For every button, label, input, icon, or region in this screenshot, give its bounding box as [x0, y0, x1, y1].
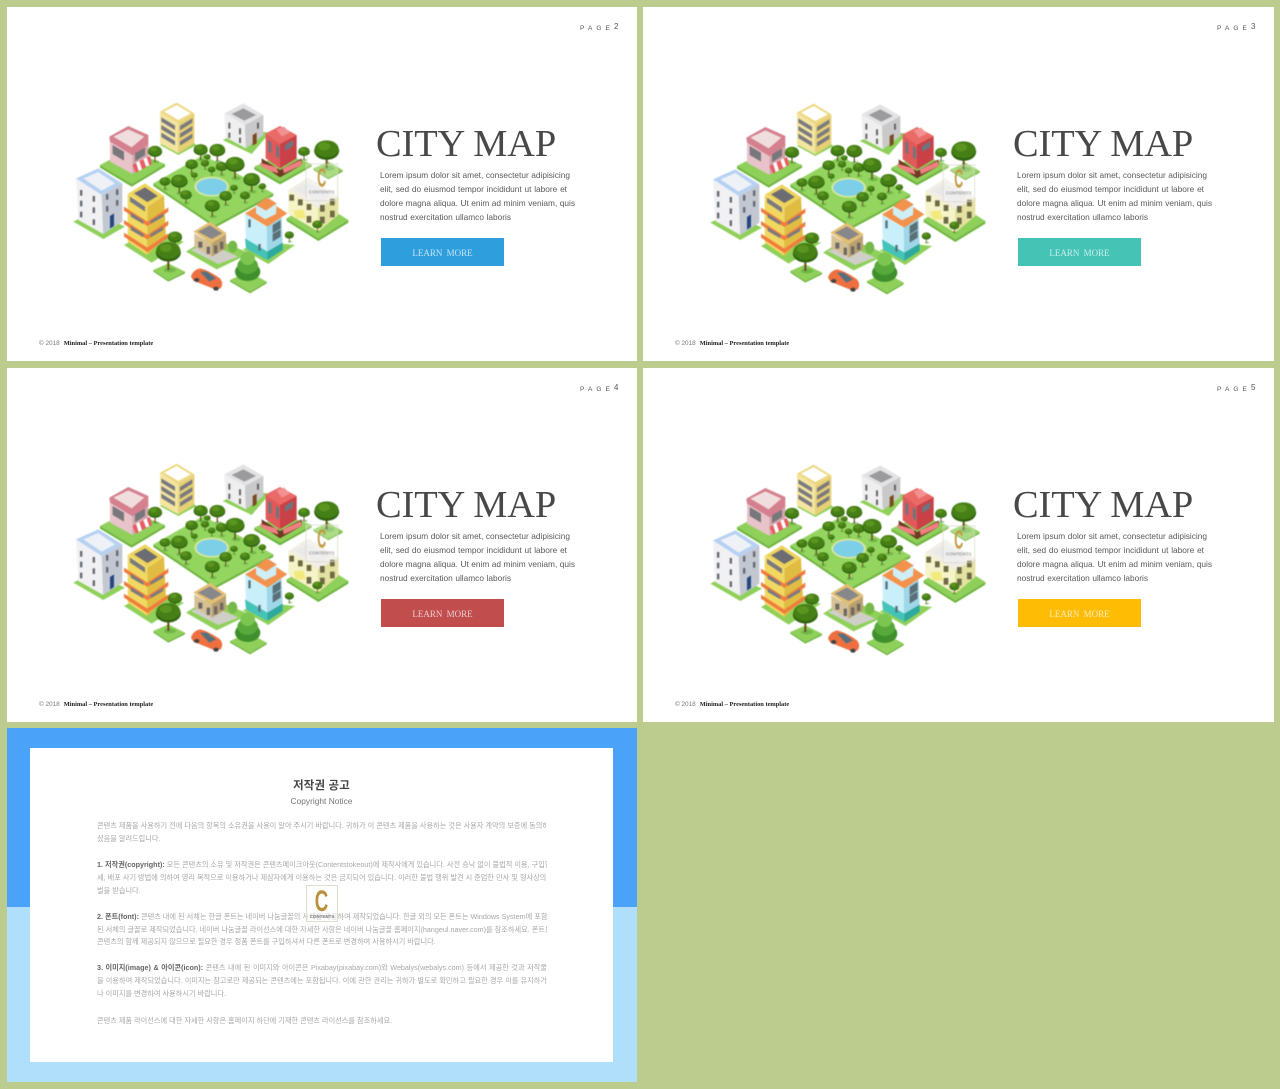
text block: copyright terms: 된 서체의 글꼴로 제작되었습니다. 네이버 나눔글꼴 라이선스에 대한 자세한 사항은 네이버 나눔글꼴 홈페이지(hangeul.naver.com)를 참조하세요. 폰트는 — [97, 925, 547, 934]
button: learn more — [381, 238, 504, 266]
title: CITY MAP — [376, 484, 556, 526]
button: learn more — [1018, 238, 1141, 266]
text block: copyright terms: 을 이용하여 제작되었습니다. 이미지는 참고로만 제공되는 콘텐츠에는 포함됩니다. 이에 관한 권리는 귀하가 별도로 확인하고 필요한 경우 이를 유지하거 — [97, 976, 547, 985]
icon: isometric city illustration — [73, 463, 350, 655]
footer: © 2018 Minimal – Presentation template — [39, 340, 153, 347]
footer: © 2018 Minimal – Presentation template — [39, 701, 153, 708]
page number: PAGE5 — [1217, 383, 1255, 393]
footer: © 2018 Minimal – Presentation template — [675, 340, 789, 347]
text block: lorem ipsum: dolore magna aliqua. Ut enim ad minim veniam, quis — [380, 559, 575, 569]
text block: lorem ipsum: dolore magna aliqua. Ut enim ad minim veniam, quis — [1017, 559, 1212, 569]
icon: gold C watermark — [306, 885, 338, 922]
text block: lorem ipsum: nostrud exercitation ullamco laboris — [1017, 212, 1148, 222]
button: learn more: LEARN MORE — [1049, 609, 1110, 619]
text block: lorem ipsum: Lorem ipsum dolor sit amet, consectetur adipisicing — [1017, 170, 1207, 180]
footer: © 2018 Minimal – Presentation template — [675, 701, 789, 708]
text block: lorem ipsum: Lorem ipsum dolor sit amet, consectetur adipisicing — [380, 170, 570, 180]
heading: copyright notice in Korean: 저작권 공고 — [293, 780, 350, 792]
button: learn more: LEARN MORE — [412, 248, 473, 258]
button: learn more — [381, 599, 504, 627]
panel: copyright notice — [7, 728, 637, 1082]
page number: PAGE2 — [580, 22, 618, 32]
panel: city map slide, page 3 — [643, 7, 1274, 361]
panel: city map slide, page 2 — [7, 7, 637, 361]
icon: gold C watermark: C — [315, 885, 328, 918]
text block: copyright terms: 1. 저작권(copyright): 모든 콘텐츠의 소유 및 저작권은 콘텐츠메이크아웃(Contentstokeout)에 제작사에게 있습니다. 사전 승낙 없이 불법적 이용, 구입한 — [97, 860, 547, 869]
text block: lorem ipsum: elit, sed do eiusmod tempor incididunt ut labore et — [1017, 545, 1204, 555]
text block: copyright terms: 벌을 받습니다. — [97, 886, 141, 895]
text block: lorem ipsum: elit, sed do eiusmod tempor incididunt ut labore et — [380, 545, 567, 555]
subheading: copyright notice: Copyright Notice — [291, 796, 352, 806]
button: learn more: LEARN MORE — [1049, 248, 1110, 258]
text block: lorem ipsum: nostrud exercitation ullamco laboris — [380, 212, 511, 222]
panel: copyright notice sheet — [30, 748, 613, 1062]
page number: PAGE3 — [1217, 22, 1255, 32]
title: CITY MAP — [1013, 484, 1193, 526]
text block: lorem ipsum: elit, sed do eiusmod tempor incididunt ut labore et — [380, 184, 567, 194]
text block: copyright terms: 콘텐츠 제품을 사용하기 전에 다음의 항목의 소유권을 사용이 알아 주시기 바랍니다. 귀하가 이 콘텐츠 제품을 사용하는 것은 사용자 계약의 보증에 동의하 — [97, 821, 547, 830]
icon: isometric city illustration — [73, 102, 350, 294]
button: learn more: LEARN MORE — [412, 609, 473, 619]
text block: lorem ipsum: nostrud exercitation ullamco laboris — [380, 573, 511, 583]
panel: city map slide, page 5 — [643, 368, 1274, 722]
text block: copyright terms: 셨음을 알려드립니다. — [97, 834, 161, 843]
text block: lorem ipsum: Lorem ipsum dolor sit amet, consectetur adipisicing — [1017, 531, 1207, 541]
panel: city map slide, page 4 — [7, 368, 637, 722]
text block: copyright terms: 나 이미지를 변경하여 사용하시기 바랍니다. — [97, 989, 226, 998]
text block: lorem ipsum — [1017, 170, 1212, 222]
page number: PAGE4 — [580, 383, 618, 393]
text block: lorem ipsum: elit, sed do eiusmod tempor incididunt ut labore et — [1017, 184, 1204, 194]
text block: lorem ipsum: dolore magna aliqua. Ut enim ad minim veniam, quis — [380, 198, 575, 208]
title: CITY MAP — [1013, 123, 1193, 165]
text block: lorem ipsum — [380, 531, 575, 583]
icon: gold C watermark: CONTENTS — [310, 914, 334, 919]
text block: copyright terms: 2. 폰트(font): 콘텐츠 내에 된 서체는 한글 폰트는 네이버 나눔글꼴의 서체를 제공하여 제작되었습니다. 한글 외의 모든 폰트는 Windows System에 포함 — [97, 912, 547, 921]
icon: isometric city illustration — [710, 464, 986, 656]
text block: lorem ipsum — [1017, 531, 1212, 583]
title: CITY MAP — [376, 123, 556, 165]
text block: copyright terms: 3. 이미지(image) & 아이콘(icon): 콘텐츠 내에 된 이미지와 아이콘은 Pixabay(pixabay.com)와 Webalys(webalys.com) 등에서 제공한 것과 저작물 — [97, 963, 547, 972]
text block: copyright terms: 콘텐츠 제품 라이선스에 대한 자세한 사항은 홈페이지 하단에 기재한 콘텐츠 라이선스를 참조하세요. — [97, 1016, 392, 1025]
text block: copyright terms: 콘텐츠의 함께 제공되지 않으므로 필요한 경우 정품 폰트를 구입하셔서 다른 폰트로 변경하여 사용하시기 바랍니다. — [97, 937, 436, 946]
text block: lorem ipsum: Lorem ipsum dolor sit amet, consectetur adipisicing — [380, 531, 570, 541]
icon: isometric city illustration — [710, 103, 986, 295]
text block: lorem ipsum — [380, 170, 575, 222]
text block: copyright terms: 세, 배포 사기 방법에 의하여 영리 목적으로 이용하거나 제삼자에게 이용하는 것은 금지되어 있습니다. 이러한 불법 행위 발견 시 준엄한 민사 및 형사상의 처 — [97, 873, 547, 882]
text block: lorem ipsum: dolore magna aliqua. Ut enim ad minim veniam, quis — [1017, 198, 1212, 208]
button: learn more — [1018, 599, 1141, 627]
text block: lorem ipsum: nostrud exercitation ullamco laboris — [1017, 573, 1148, 583]
